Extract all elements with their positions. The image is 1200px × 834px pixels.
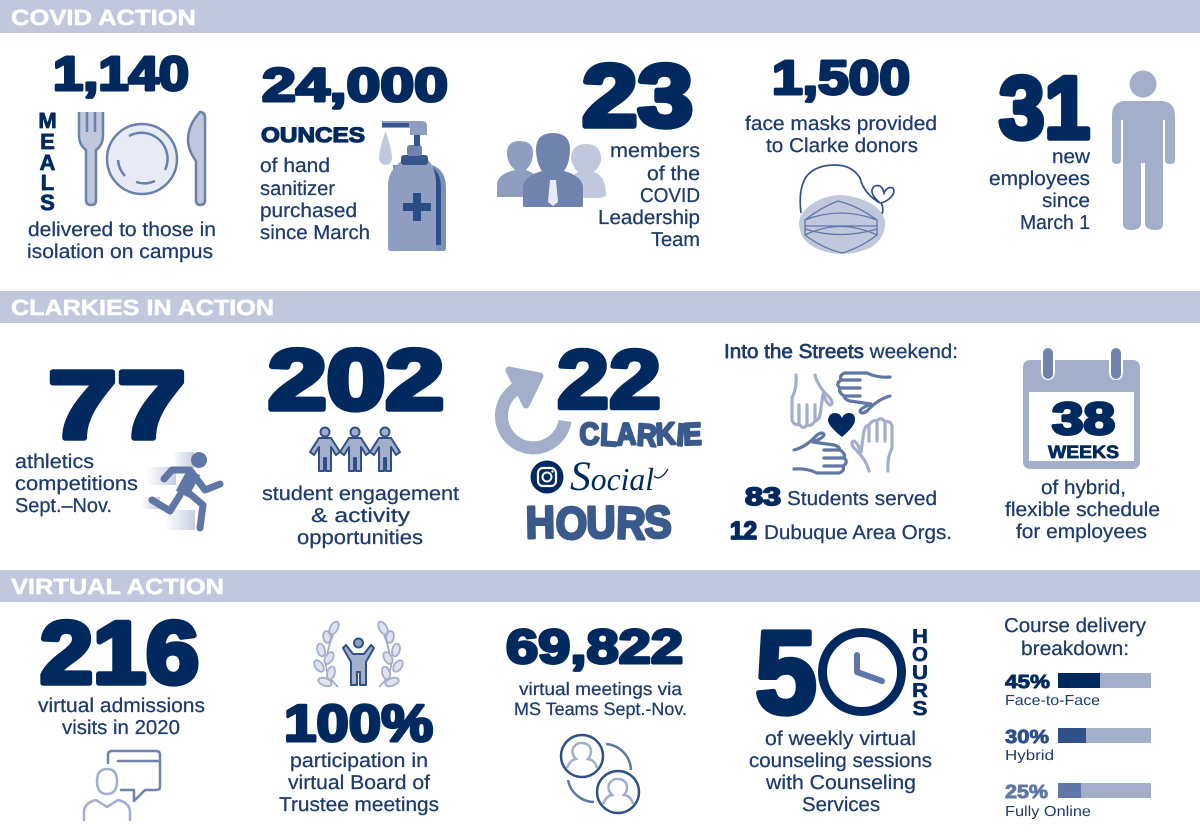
caption: leadership team: COVID: [640, 185, 700, 207]
heading band: VIRTUAL ACTION: VIRTUAL ACTION: [11, 574, 224, 599]
caption: face masks: [745, 113, 937, 157]
heading: course delivery: [1004, 615, 1146, 660]
icon: person: [1112, 70, 1175, 230]
number: 23: 23: [582, 46, 693, 145]
stat: 38 weeks: [1005, 348, 1160, 543]
bar: 30% hybrid: 30%: [1005, 727, 1049, 748]
icon: calendar: [1023, 348, 1140, 469]
number: 69,822: 69,822: [506, 621, 683, 674]
vertical label: HOURS: U: [912, 662, 928, 684]
icon: circular arrow: [501, 370, 565, 448]
course delivery breakdown: [1004, 615, 1151, 820]
vertical label: HOURS: [912, 626, 929, 720]
caption: meetings: [514, 679, 687, 719]
vertical label: HOURS: R: [912, 680, 929, 702]
caption: athletics: Sept.–Nov.: [15, 495, 112, 517]
bar: 30% hybrid: [1005, 727, 1151, 764]
icon: clock as zero: [822, 632, 902, 712]
stat: 23 leadership team: [497, 46, 700, 251]
caption: leadership team: Team: [651, 229, 700, 251]
icon: person in laurels: [312, 620, 405, 688]
caption: hybrid schedule: for employees: [1016, 521, 1147, 543]
icon: face mask: [799, 165, 894, 254]
icon: four hands and heart: [792, 373, 892, 473]
stat: 202 engagement: [262, 333, 459, 549]
caption: leadership team: [598, 140, 700, 251]
icon: runner: [140, 452, 220, 530]
caption: participation: participation in: [290, 750, 428, 772]
stat line: 83 students served: [745, 483, 937, 511]
caption: sanitizer: of hand: [260, 155, 330, 177]
number: 22: 22: [557, 333, 661, 426]
icon: leadership team silhouettes: [497, 133, 606, 207]
vertical label: HOURS: H: [912, 626, 928, 648]
number: 202: 202: [268, 333, 444, 428]
number: 77: 77: [48, 352, 186, 459]
caption: engagement: student engagement: [262, 483, 459, 505]
bar: 30% hybrid: Hybrid: [1005, 748, 1054, 764]
number: 5: 5: [755, 607, 817, 739]
stat: 50 hours: [749, 607, 932, 816]
caption: meals: [27, 219, 216, 263]
icon: fork: [79, 112, 103, 205]
number: 24,000: 24,000: [262, 58, 448, 111]
stat line: 12 Dubuque area orgs: [730, 517, 952, 545]
caption: leadership team: of the: [647, 163, 700, 185]
icon: connected meeting users: [561, 735, 639, 813]
caption: athletics: competitions: [15, 473, 138, 495]
label: HOURS: HOURS: [525, 496, 672, 549]
caption: new employees: new: [1052, 146, 1091, 168]
number: 31: 31: [999, 58, 1090, 157]
stat line: 83 students served: 83: [745, 483, 781, 511]
caption: sanitizer: since March: [260, 222, 370, 244]
caption: face masks: to Clarke donors: [766, 135, 918, 157]
stat: Into the Streets: [724, 341, 958, 545]
bar: 45% face-to-face: [1005, 672, 1151, 709]
caption: counseling: of weekly virtual: [765, 728, 916, 750]
caption: new employees: March 1: [1020, 212, 1090, 234]
icon: plate: [107, 124, 177, 194]
heading band: VIRTUAL ACTION: [0, 570, 1200, 602]
vertical label: MEALS: S: [40, 190, 55, 215]
vertical label: HOURS: O: [912, 644, 928, 666]
label: Social: Social: [570, 454, 654, 500]
caption: leadership team: members: [610, 140, 700, 162]
caption: engagement: opportunities: [297, 527, 423, 549]
caption: admissions: virtual admissions: [38, 695, 205, 717]
label: WEEKS: WEEKS: [1048, 442, 1119, 462]
stat: 31 new employees: [989, 58, 1175, 234]
caption: counseling: Services: [802, 794, 880, 816]
vertical label: MEALS: M: [38, 108, 57, 133]
heading band: CLARKIES IN ACTION: [0, 291, 1200, 323]
caption: meetings: MS Teams Sept.-Nov.: [514, 699, 687, 719]
heading band: COVID ACTION: [0, 0, 1200, 33]
caption: participation: [279, 750, 439, 816]
stat: 100% participation: [279, 620, 439, 816]
label: CLARKIE: CLARKIE: [579, 416, 702, 453]
caption: hybrid schedule: of hybrid,: [1041, 477, 1126, 499]
stat: 69,822 meetings: [506, 621, 687, 813]
caption: athletics: [15, 451, 138, 517]
icon: instagram: [530, 460, 564, 494]
caption: meals: isolation on campus: [27, 241, 213, 263]
stat: 77 athletics: [15, 352, 220, 530]
bar: 45% face-to-face: 45%: [1005, 672, 1050, 693]
caption: admissions: [38, 695, 205, 739]
caption: leadership team: Leadership: [598, 207, 700, 229]
caption: sanitizer: sanitizer: [260, 178, 335, 200]
bar: 25% fully online: 25%: [1005, 782, 1048, 803]
caption: meetings: virtual meetings via: [519, 679, 683, 699]
caption: meals: delivered to those in: [28, 219, 216, 241]
section: Clarkies in action: [0, 291, 1200, 549]
caption: counseling: [749, 728, 932, 816]
bar: 45% face-to-face: Face-to-Face: [1005, 693, 1100, 709]
caption: new employees: [989, 146, 1091, 234]
caption: engagement: [262, 483, 459, 549]
caption: new employees: employees: [989, 168, 1090, 190]
bar: 25% fully online: Fully Online: [1005, 804, 1091, 820]
caption: sanitizer: [260, 155, 370, 244]
caption: counseling: counseling sessions: [749, 750, 932, 772]
icon: knife: [188, 112, 205, 205]
number: 100%: 100%: [284, 695, 433, 753]
caption: engagement: & activity: [311, 505, 410, 527]
caption: new employees: since: [1042, 190, 1090, 212]
caption: participation: Trustee meetings: [279, 794, 439, 816]
stat: 22 social hours: [501, 333, 702, 549]
stat line: 12 Dubuque area orgs: Dubuque Area Orgs.: [764, 522, 952, 544]
caption: counseling: with Counseling: [765, 772, 916, 794]
icon: three linked people: [310, 428, 400, 471]
caption: admissions: visits in 2020: [62, 717, 180, 739]
vertical label: MEALS: A: [40, 150, 56, 175]
stat line: 12 Dubuque area orgs: 12: [730, 517, 757, 545]
icon: person with speech bubble: [84, 751, 160, 820]
stat: 1,140 meals: [27, 48, 216, 263]
heading: course delivery: Course delivery: [1004, 615, 1146, 637]
caption: sanitizer: purchased: [260, 200, 357, 222]
heading: Into the Streets weekend: Into the Streets weekend:: [724, 341, 958, 363]
number: 1,140: 1,140: [53, 48, 189, 101]
vertical label: HOURS: S: [912, 698, 928, 720]
stat line: 83 students served: Students served: [787, 488, 937, 510]
heading band: CLARKIES IN ACTION: CLARKIES IN ACTION: [11, 295, 274, 320]
caption: face masks: face masks provided: [745, 113, 937, 135]
stat: 24,000 ounces: [260, 58, 448, 251]
vertical label: MEALS: L: [41, 170, 54, 195]
caption: hybrid schedule: [1005, 477, 1160, 543]
number: 216: 216: [40, 603, 199, 702]
heading: course delivery: breakdown:: [1021, 638, 1129, 660]
vertical label: MEALS: E: [40, 129, 55, 154]
stat: 1,500 face masks: [745, 52, 937, 254]
number: 38: 38: [1052, 393, 1115, 444]
bar: 25% fully online: [1005, 782, 1151, 820]
caption: athletics: athletics: [15, 451, 94, 473]
section: COVID action: [0, 0, 1200, 263]
caption: participation: virtual Board of: [288, 772, 430, 794]
stat: 216 admissions: [38, 603, 205, 820]
caption: hybrid schedule: flexible schedule: [1005, 499, 1160, 521]
section: Virtual action: [0, 570, 1200, 820]
icon: sanitizer bottle: [379, 121, 446, 251]
label: OUNCES: OUNCES: [261, 124, 365, 147]
heading band: COVID ACTION: COVID ACTION: [11, 5, 196, 30]
vertical label: MEALS: [38, 108, 57, 215]
number: 1,500: 1,500: [772, 52, 910, 105]
